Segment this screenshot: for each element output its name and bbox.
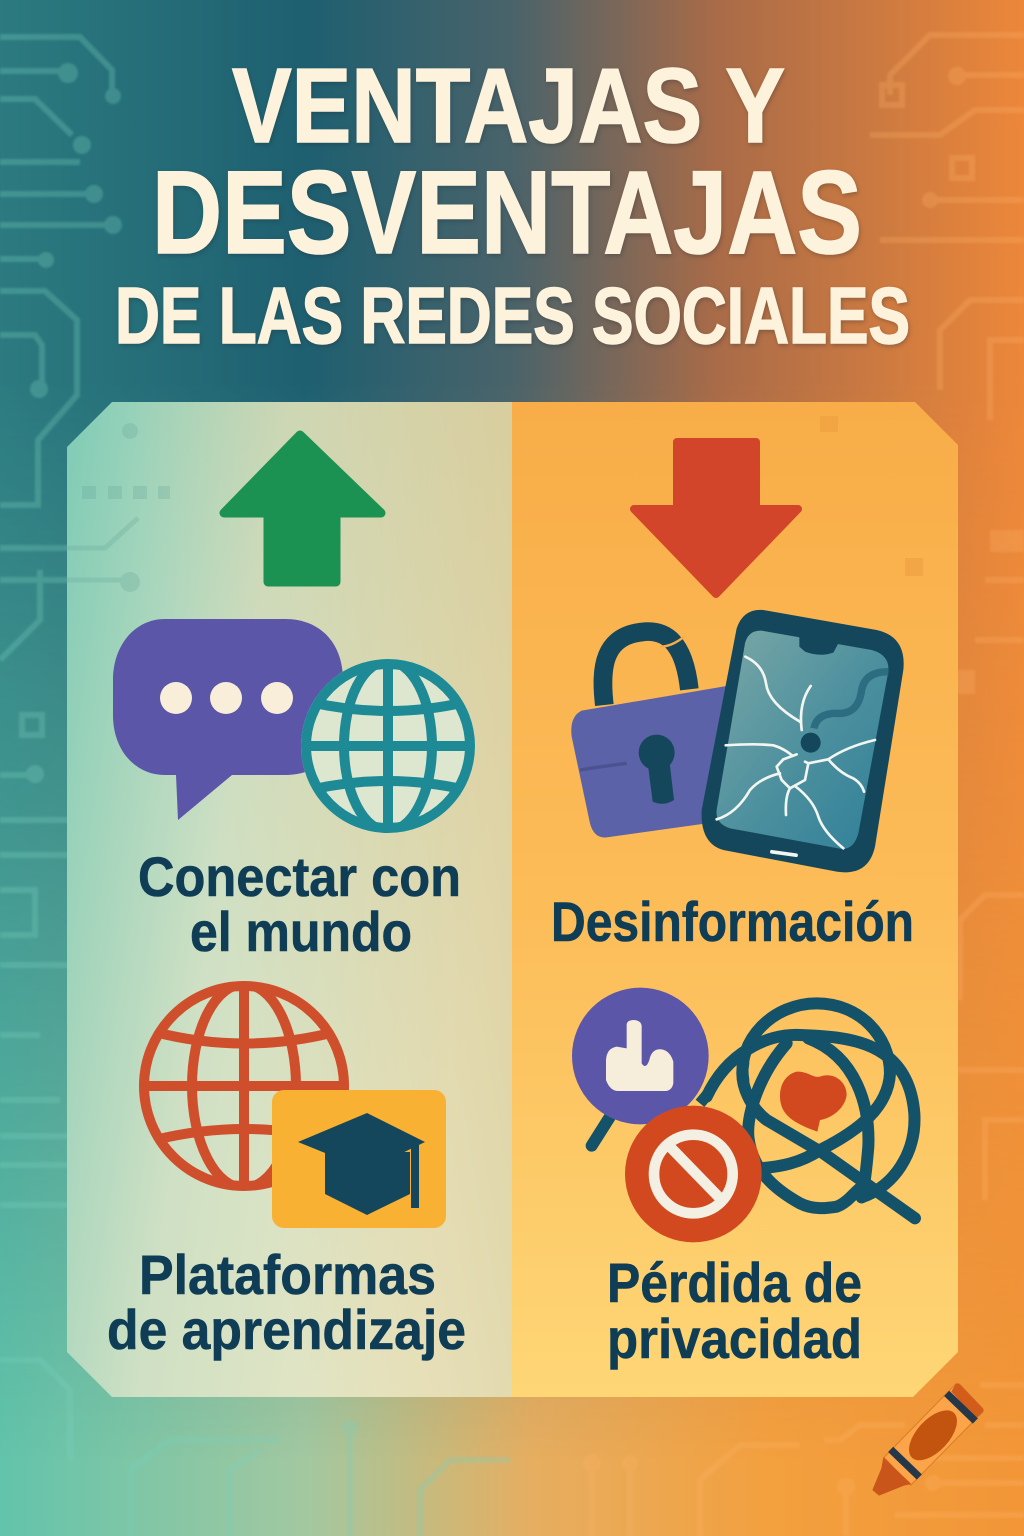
icon: padlock and broken phone [571,610,904,872]
title: DESVENTAJAS [152,147,862,279]
text: perdida de privacidad: Pérdida de [607,1251,862,1314]
icon: crayon [872,1384,983,1496]
icon: red down arrow [634,442,798,594]
title: VENTAJAS Y [232,47,785,165]
text: conectar con el mundo: Conectar con [138,845,461,908]
icon: green up arrow [224,435,381,582]
text: perdida de privacidad [607,1251,862,1370]
text: perdida de privacidad: privacidad [607,1307,862,1370]
panel: disadvantages [512,402,958,1397]
title [115,47,910,360]
icon: speech bubble and globe [113,619,476,833]
text: conectar con el mundo: el mundo [190,900,412,963]
circuit pattern left [0,37,510,1536]
icon: heart [780,1072,847,1132]
panel: advantages [67,402,512,1397]
text: desinformacion: Desinformación [551,890,914,953]
icon: hand [606,1020,673,1091]
circuit pattern right [583,35,1024,1536]
icon: privacy loss tangle [572,988,915,1242]
text: plataformas de aprendizaje [107,1243,466,1361]
text: plataformas de aprendizaje: de aprendizaje [107,1298,466,1361]
icon: globe and graduation cap [140,984,446,1228]
text: plataformas de aprendizaje: Plataformas [139,1243,436,1306]
text: conectar con el mundo [138,845,461,963]
